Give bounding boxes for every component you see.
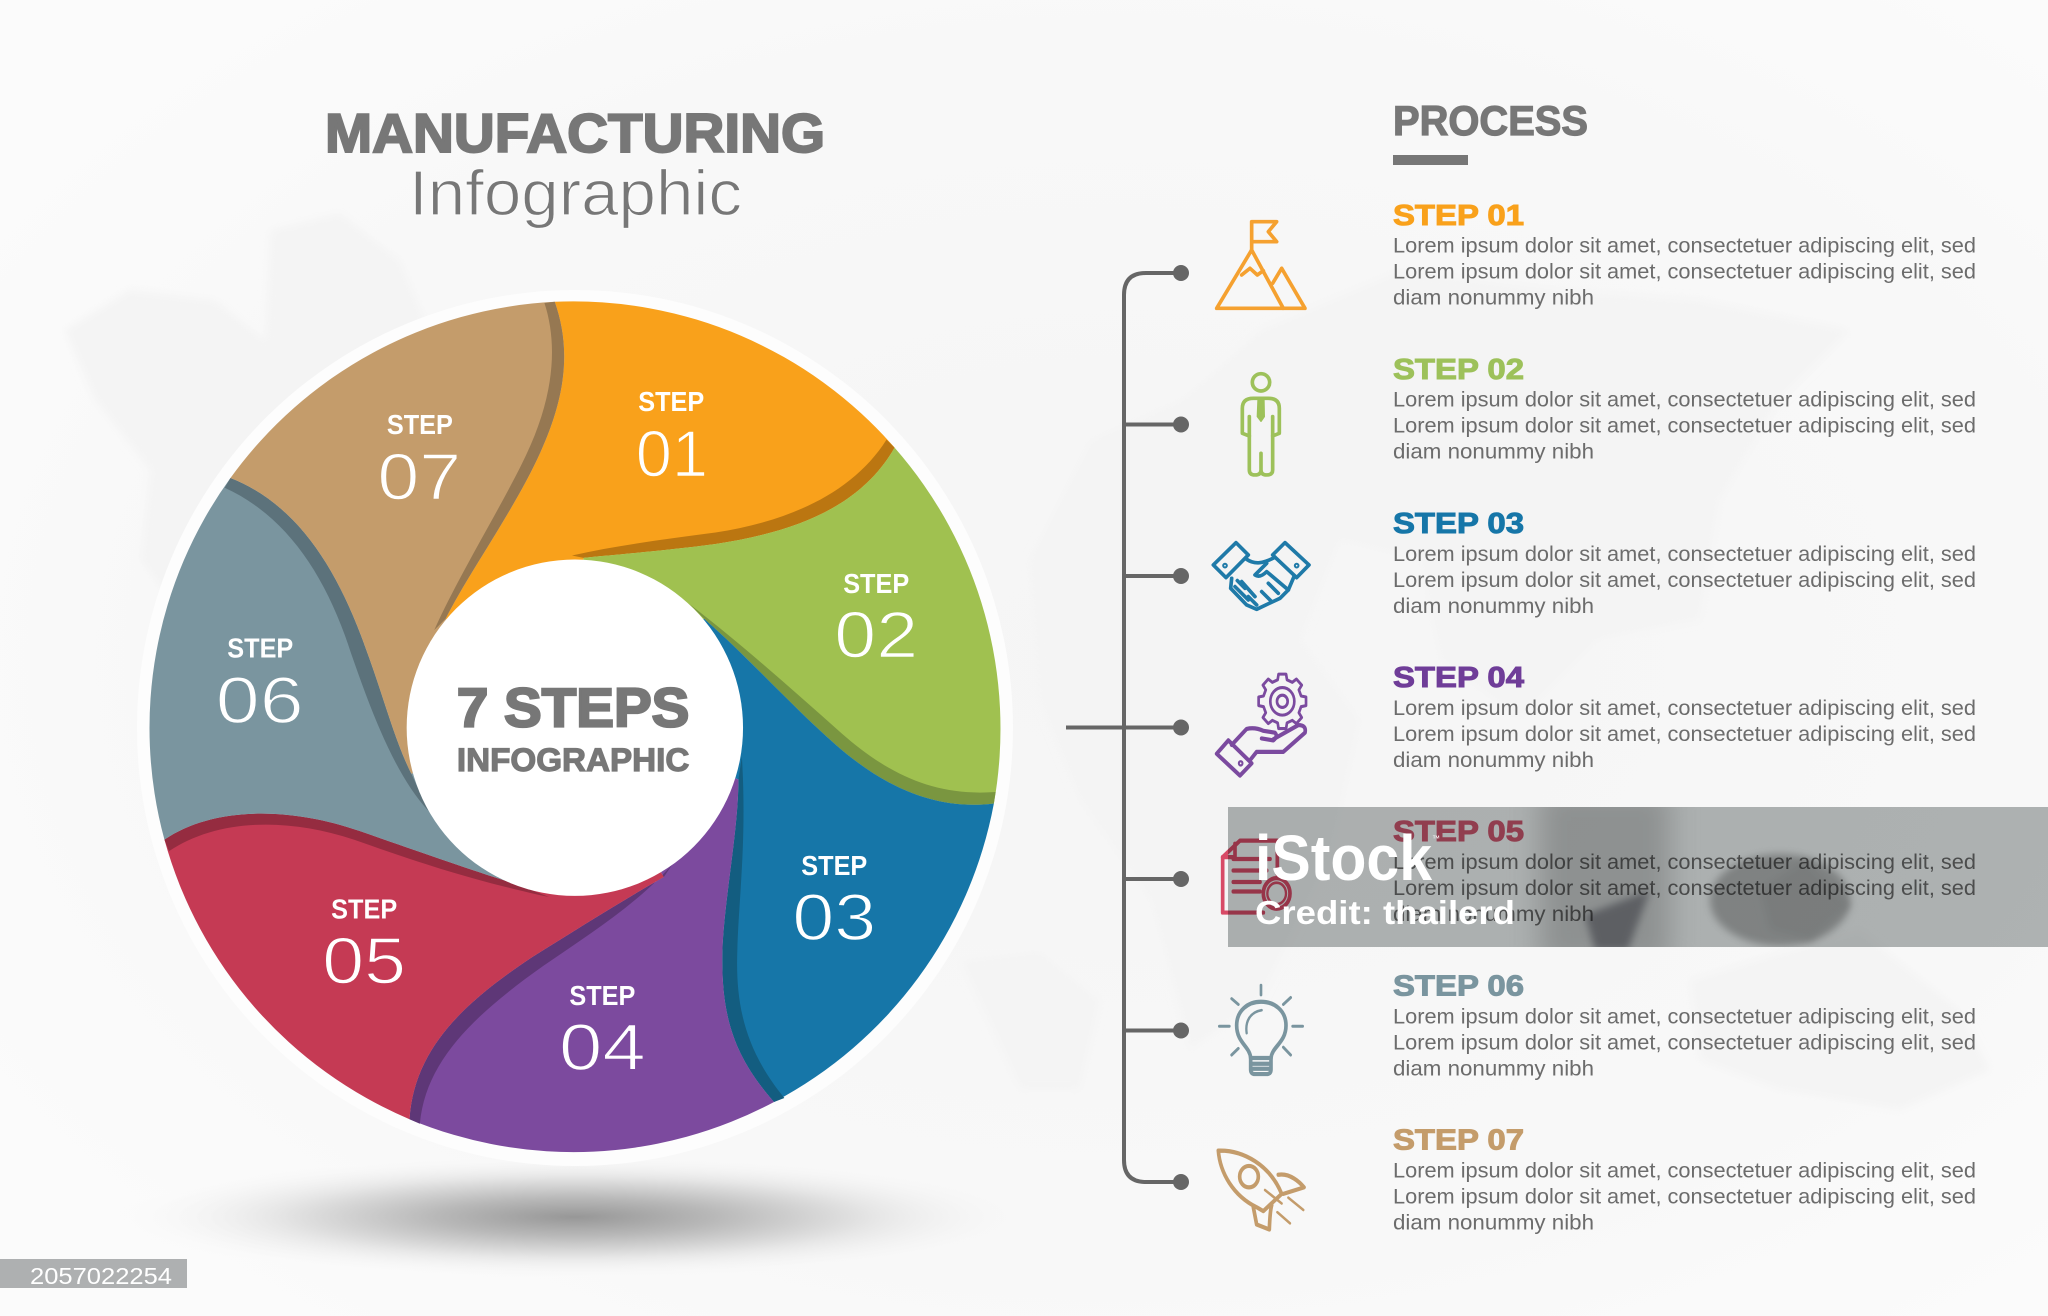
centre circle: 7 STEPS — [457, 677, 689, 739]
label: step 02: 02 — [834, 598, 918, 672]
label: step 04: 04 — [559, 1010, 646, 1084]
label: step 05 — [322, 893, 406, 998]
step 04 text: diam nonummy nibh — [1393, 749, 1594, 772]
blade: step 05 — [164, 728, 664, 1119]
blade: step 04 — [410, 728, 774, 1152]
centre circle: INFOGRAPHIC — [457, 742, 689, 778]
watermark band: ™ — [1432, 834, 1440, 843]
step 01 text: Lorem ipsum dolor sit amet, consectetuer adipiscing elit, sed — [1393, 260, 1976, 284]
image id tag — [0, 1259, 187, 1289]
label: step 07: 07 — [377, 439, 461, 513]
title: MANUFACTURING — [325, 102, 825, 164]
step 03 text: STEP 03 — [1393, 508, 1524, 540]
step 04 text: Lorem ipsum dolor sit amet, consectetuer adipiscing elit, sed — [1393, 697, 1976, 720]
label: step 07 — [377, 409, 461, 513]
label: step 01: STEP — [638, 386, 704, 417]
wheel shadow — [115, 1155, 1035, 1279]
icon: light bulb — [1219, 985, 1303, 1074]
icon: rocket — [1218, 1151, 1304, 1229]
step 02 text: Lorem ipsum dolor sit amet, consectetuer adipiscing elit, sed — [1393, 414, 1976, 438]
label: step 04: STEP — [569, 980, 635, 1011]
step 06 text: Lorem ipsum dolor sit amet, consectetuer adipiscing elit, sed — [1393, 1032, 1976, 1054]
label: step 01: 01 — [636, 416, 708, 490]
icon: gear and hand — [1217, 674, 1306, 776]
step 06 text: diam nonummy nibh — [1393, 1058, 1594, 1080]
step 04 text — [1393, 662, 1976, 772]
label: step 03: STEP — [801, 850, 867, 881]
icon: document with seal — [1223, 841, 1290, 913]
blade: step 03 — [575, 619, 994, 1102]
label: step 06: STEP — [227, 633, 293, 664]
step 02 text — [1393, 354, 1976, 464]
image id tag: 2057022254 — [30, 1263, 172, 1289]
label: step 05: STEP — [331, 893, 397, 924]
step 01 text — [1393, 200, 1976, 310]
label: step 06: 06 — [216, 663, 304, 737]
step 05 text: Lorem ipsum dolor sit amet, consectetuer adipiscing elit, sed — [1393, 877, 1976, 900]
step 01 text: diam nonummy nibh — [1393, 286, 1594, 310]
step 02 text: diam nonummy nibh — [1393, 440, 1594, 464]
step 03 text — [1393, 508, 1976, 618]
step 07 text: STEP 07 — [1393, 1124, 1524, 1156]
label: step 03 — [792, 850, 876, 954]
step 03 text: Lorem ipsum dolor sit amet, consectetuer adipiscing elit, sed — [1393, 543, 1976, 566]
label: step 03: 03 — [792, 880, 876, 954]
step 05 text: diam nonummy nibh — [1393, 903, 1594, 926]
heading: process: PROCESS — [1393, 97, 1588, 144]
title: Infographic — [409, 157, 742, 229]
step 06 text: Lorem ipsum dolor sit amet, consectetuer adipiscing elit, sed — [1393, 1006, 1976, 1028]
watermark band — [1228, 807, 2048, 947]
connector lines — [1066, 265, 1189, 1190]
blade: step 02 — [575, 448, 1000, 805]
label: step 04 — [559, 980, 646, 1084]
step 04 text: STEP 04 — [1393, 662, 1524, 694]
blade: step 06 — [149, 478, 575, 886]
icon: handshake — [1213, 543, 1309, 609]
label: step 02: STEP — [843, 568, 909, 599]
step 05 text: Lorem ipsum dolor sit amet, consectetuer adipiscing elit, sed — [1393, 851, 1976, 874]
step 01 text: Lorem ipsum dolor sit amet, consectetuer adipiscing elit, sed — [1393, 234, 1976, 258]
label: step 07: STEP — [387, 409, 453, 440]
step 07 text: diam nonummy nibh — [1393, 1212, 1594, 1234]
step 07 text: Lorem ipsum dolor sit amet, consectetuer adipiscing elit, sed — [1393, 1186, 1976, 1208]
step 07 text — [1393, 1124, 1976, 1234]
step 06 text: STEP 06 — [1393, 970, 1524, 1002]
seven step wheel — [137, 290, 1013, 1166]
step 03 text: diam nonummy nibh — [1393, 595, 1594, 618]
step 06 text — [1393, 970, 1976, 1080]
heading: process — [1393, 97, 1588, 165]
icon: mountain with flag — [1217, 222, 1305, 308]
centre circle — [407, 560, 743, 896]
world map background — [65, 213, 1990, 1110]
watermark band: iStock — [1255, 822, 1432, 894]
step 03 text: Lorem ipsum dolor sit amet, consectetuer adipiscing elit, sed — [1393, 569, 1976, 592]
blade: step 01 — [446, 301, 895, 728]
step 05 text — [1393, 816, 1976, 926]
title — [325, 102, 825, 229]
label: step 02 — [834, 568, 918, 672]
step 01 text: STEP 01 — [1393, 200, 1524, 232]
step 05 text: STEP 05 — [1393, 816, 1524, 848]
watermark band: Credit: thailerd — [1255, 894, 1515, 931]
blade: step 07 — [230, 302, 575, 774]
icon: person — [1242, 374, 1279, 475]
label: step 05: 05 — [322, 924, 406, 998]
label: step 06 — [216, 633, 304, 737]
step 07 text: Lorem ipsum dolor sit amet, consectetuer adipiscing elit, sed — [1393, 1160, 1976, 1182]
step 02 text: STEP 02 — [1393, 354, 1524, 386]
step 04 text: Lorem ipsum dolor sit amet, consectetuer adipiscing elit, sed — [1393, 723, 1976, 746]
step 02 text: Lorem ipsum dolor sit amet, consectetuer adipiscing elit, sed — [1393, 388, 1976, 412]
